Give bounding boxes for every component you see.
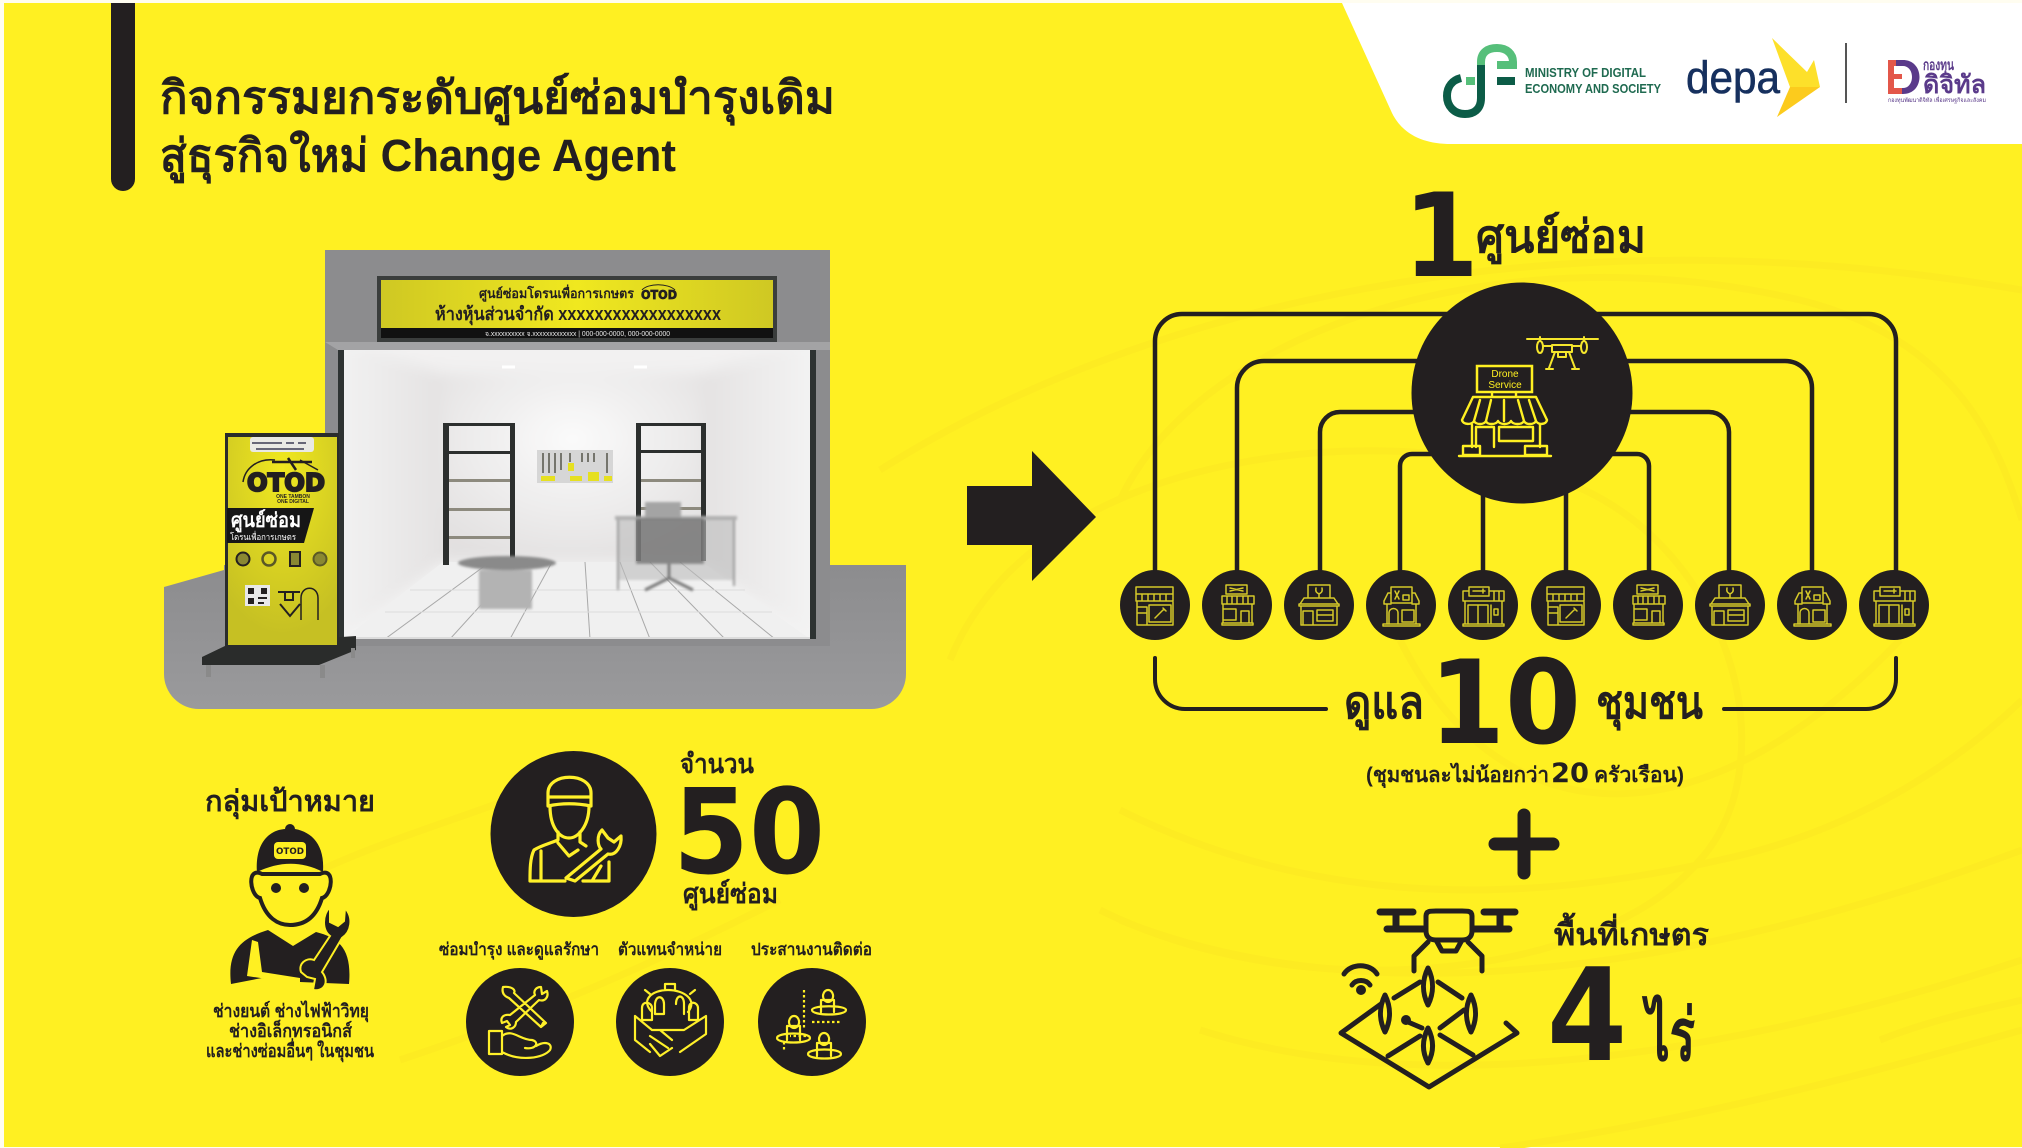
text: cares for 10 communities: ชุมชน xyxy=(1596,677,1703,731)
count 50 repair centres: 50 xyxy=(673,763,825,901)
pegboard with tools xyxy=(537,450,613,483)
shop interior xyxy=(330,340,825,650)
note: households per community: ครัวเรือน) xyxy=(1594,763,1684,787)
icon: maintenance xyxy=(466,968,574,1076)
icon: mechanic with otod cap xyxy=(230,824,350,990)
title: สู่ธุรกิจใหม่ Change Agent xyxy=(160,129,676,184)
heading: 1 repair centre: ศูนย์ซ่อม xyxy=(1476,211,1646,265)
note: households per community: 20 xyxy=(1551,758,1589,789)
standee xyxy=(202,433,356,678)
community 10 xyxy=(1859,570,1929,640)
community 7 xyxy=(1613,570,1683,640)
target group heading: กลุ่มเป้าหมาย xyxy=(205,786,375,819)
logo divider xyxy=(1845,43,1847,103)
plus sign xyxy=(1495,815,1553,873)
logo: digital fund xyxy=(1888,57,1986,104)
text: farm area 4 rai: พื้นที่เกษตร xyxy=(1554,912,1709,952)
service labels xyxy=(439,940,872,961)
standee: โดรนเพื่อการเกษตร xyxy=(230,530,296,542)
logo: depa xyxy=(1686,38,1820,117)
text: cares for 10 communities: 10 xyxy=(1429,636,1581,771)
logo: ministry of digital economy and society: ECONOMY AND SOCIETY xyxy=(1525,82,1662,96)
shop sign: จ.xxxxxxxxxx จ.xxxxxxxxxxxxx | 000-000-0000, 000-000-0000 xyxy=(485,331,670,338)
shop sign xyxy=(377,276,777,342)
community 6 xyxy=(1531,570,1601,640)
target group description: ช่างยนต์ ช่างไฟฟ้าวิทยุ xyxy=(213,1000,369,1023)
note: households per community xyxy=(1366,758,1684,789)
logo: ministry of digital economy and society xyxy=(1447,48,1662,114)
service labels: ตัวแทนจำหน่าย xyxy=(618,940,722,959)
central drone service circle xyxy=(1412,282,1632,504)
target group description: ช่างอิเล็กทรอนิกส์ xyxy=(229,1019,353,1041)
community circles xyxy=(1120,570,1929,640)
left shelf xyxy=(443,423,515,565)
icon: drone service shop: Service xyxy=(1488,380,1522,391)
standee: ONE TAMBON xyxy=(276,494,310,500)
desk and chair xyxy=(615,502,737,590)
icon: drone service shop xyxy=(1459,366,1551,456)
target group description xyxy=(206,1000,375,1063)
note: households per community: (ชุมชนละไม่น้อยกว่า xyxy=(1366,762,1549,789)
text: farm area 4 rai xyxy=(1547,912,1709,1091)
heading: 1 repair centre xyxy=(1403,169,1646,304)
bracket left xyxy=(1155,658,1326,709)
community 1 xyxy=(1120,570,1190,640)
shop sign: ศูนย์ซ่อมโดรนเพื่อการเกษตร xyxy=(479,284,634,302)
text: farm area 4 rai: 4 xyxy=(1547,942,1627,1091)
shop sign: OTOD xyxy=(641,288,677,302)
logo: digital fund: กองทุนพัฒนาดิจิทัล เพื่อเศรษฐกิจและสังคม xyxy=(1888,96,1986,104)
icon: distributor handshake xyxy=(616,968,724,1076)
title: กิจกรรมยกระดับศูนย์ซ่อมบำรุงเดิม xyxy=(160,72,835,126)
standee: OTOD xyxy=(247,468,325,497)
right shelf xyxy=(636,423,706,561)
icon: drone xyxy=(1527,337,1598,369)
title xyxy=(160,72,835,184)
text: farm area 4 rai: ไร่ xyxy=(1641,993,1695,1076)
logo: depa: depa xyxy=(1686,52,1781,103)
ground xyxy=(164,565,906,709)
shop sign: ห้างหุ้นส่วนจำกัด xxxxxxxxxxxxxxxxxx xyxy=(435,304,721,326)
standee: ศูนย์ซ่อม xyxy=(231,509,301,534)
service labels: ประสานงานติดต่อ xyxy=(751,940,872,959)
icon: coordination network xyxy=(758,968,866,1076)
logo: digital fund: ดิจิทัล xyxy=(1923,71,1986,99)
standee: ONE DIGITAL xyxy=(277,499,309,505)
icon: drone over field xyxy=(1341,911,1517,1087)
count 50 repair centres: ศูนย์ซ่อม xyxy=(683,878,778,911)
community 9 xyxy=(1777,570,1847,640)
text: cares for 10 communities xyxy=(1344,636,1703,771)
logo: digital fund: กองทุน xyxy=(1923,57,1955,75)
count 50 repair centres: จำนวน xyxy=(680,749,754,779)
icon: drone service shop: Drone xyxy=(1491,369,1519,380)
community 5 xyxy=(1448,570,1518,640)
bracket right xyxy=(1724,658,1896,709)
title accent bar xyxy=(111,3,135,191)
service labels: ซ่อมบำรุง และดูแลรักษา xyxy=(439,940,599,961)
community 3 xyxy=(1284,570,1354,640)
connector lines xyxy=(1155,314,1896,605)
shop front illustration xyxy=(164,250,906,709)
target group description: และช่างซ่อมอื่นๆ ในชุมชน xyxy=(206,1038,375,1063)
arrow xyxy=(967,451,1096,581)
logo: ministry of digital economy and society: MINISTRY OF DIGITAL xyxy=(1525,66,1646,80)
community 2 xyxy=(1202,570,1272,640)
community 8 xyxy=(1695,570,1765,640)
heading: 1 repair centre: 1 xyxy=(1403,169,1479,304)
logo panel xyxy=(1342,3,2022,144)
community 4 xyxy=(1366,570,1436,640)
text: cares for 10 communities: ดูแล xyxy=(1344,677,1424,731)
building wall xyxy=(325,250,830,646)
icon: repairman circle xyxy=(490,751,656,917)
round table xyxy=(458,556,556,609)
icon: mechanic with otod cap: OTOD xyxy=(276,847,304,857)
